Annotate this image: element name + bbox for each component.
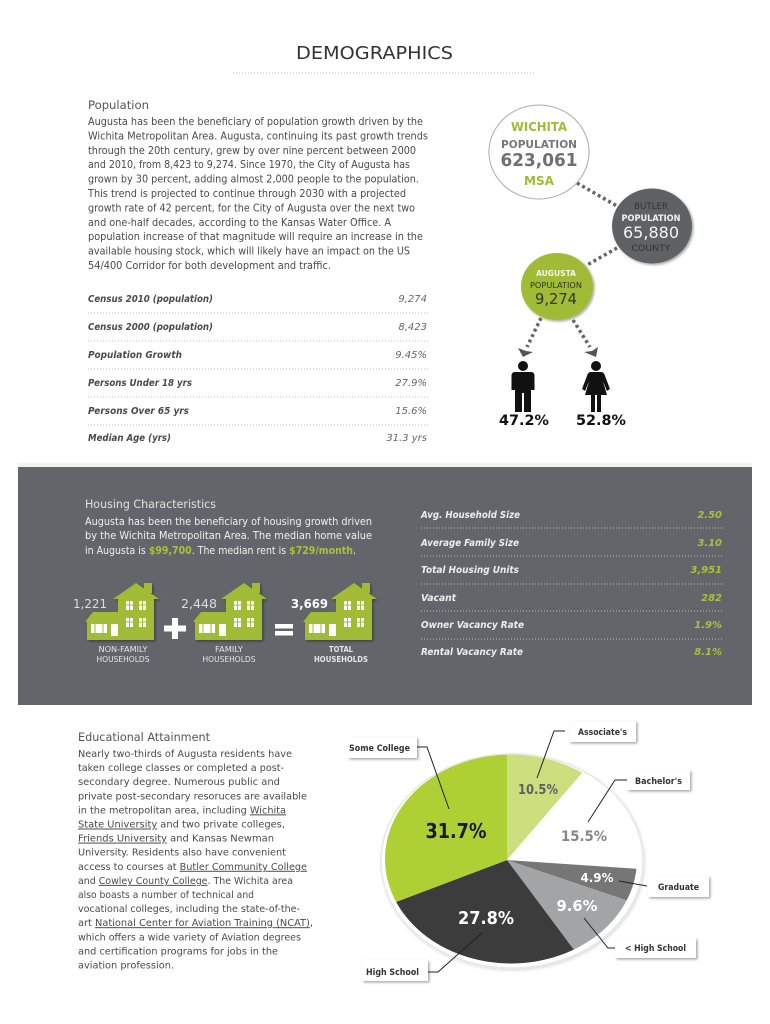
text block: population: growth rate of 42 percent, for the City of Augusta over the next two [88, 203, 415, 214]
table: population statistics: Persons Over 65 yrs [88, 406, 189, 417]
value: 15.5%: 15.5% [561, 829, 607, 845]
text block: education: taken college classes or completed a post- [78, 763, 284, 774]
table: population statistics [88, 294, 428, 444]
text block: housing [85, 517, 372, 557]
circle: Augusta: POPULATION [530, 281, 582, 290]
diagram: population hierarchy [489, 105, 692, 429]
value: family: 2,448 [181, 597, 217, 611]
text block: education: in the metropolitan area, including Wichita [78, 805, 286, 816]
value: total: 3,669 [291, 597, 328, 611]
text block: housing: by the Wichita Metropolitan Area. The median home value [85, 531, 372, 542]
text block: education: and certification programs for jobs in the [78, 946, 278, 957]
label: male percent: 47.2% [499, 413, 549, 429]
callout: some college [348, 737, 417, 758]
text block: population: and one-half decades, according to the Kansas Water Office. A [88, 218, 391, 229]
icon: plus [164, 618, 186, 639]
callout: bachelor's [627, 770, 690, 790]
leader: graduate [619, 881, 647, 886]
callout: graduate [648, 876, 709, 897]
leader: bachelor's [588, 780, 627, 822]
circle: Augusta [521, 253, 593, 320]
leader: high school [428, 933, 482, 972]
slice: graduate [508, 860, 636, 900]
table: population statistics: Census 2000 (population) [88, 322, 213, 333]
circle: Wichita: WICHITA [511, 119, 567, 134]
text block: education: secondary degree. Numerous public and [78, 777, 280, 788]
text block: population: 54/400 Corridor for both development and traffic. [88, 261, 331, 272]
table: population statistics: 8,423 [398, 322, 427, 333]
text block: education: University. Residents also have convenient [78, 848, 286, 859]
text block: education: Friends University and Kansas Newman [78, 834, 274, 845]
text block: population: available housing stock, which will likely have an impact on the US [88, 247, 410, 258]
callout: bachelor's: Bachelor's [635, 777, 682, 787]
table: housing statistics: 8.1% [694, 647, 722, 658]
slice: high school [396, 860, 574, 964]
table: housing statistics: 2.50 [697, 510, 722, 521]
callout: associate's: Associate's [578, 728, 627, 738]
circle: Wichita: POPULATION [501, 139, 577, 151]
label: total [314, 645, 368, 664]
table: housing statistics: 1.9% [694, 620, 722, 631]
connector: Wichita to Butler [577, 183, 617, 206]
text block: education: Nearly two-thirds of Augusta residents have [78, 749, 292, 760]
value: 31.7%: 31.7% [426, 819, 486, 843]
label: female percent: 52.8% [576, 413, 626, 429]
heading: population: Population [88, 98, 149, 112]
circle: Wichita: 623,061 [500, 150, 578, 171]
heading: educational attainment: Educational Attainment [78, 730, 210, 744]
pie chart: educational attainment [348, 721, 709, 981]
text block: education: State University and two private colleges, [78, 820, 285, 830]
icon: man [512, 361, 534, 412]
table: population statistics: Census 2010 (population) [88, 294, 213, 305]
text block: population: through the 20th century, grew by over nine percent between 2000 [88, 146, 416, 157]
arrow: to male [518, 318, 541, 357]
text block: education: art National Center for Aviation Training (NCAT), [78, 918, 313, 929]
leader: associate's [537, 731, 565, 778]
label: non-family: HOUSEHOLDS [96, 655, 150, 664]
table: housing statistics: Rental Vacancy Rate [421, 647, 523, 658]
callout: graduate: Graduate [658, 883, 699, 893]
circle: Butler: COUNTY [632, 244, 671, 254]
label: family [202, 645, 256, 664]
text block: population: This trend is projected to continue through 2030 with a projected [87, 189, 406, 200]
title: DEMOGRAPHICS [296, 43, 453, 64]
table: population statistics: 9.45% [395, 350, 427, 361]
table: population statistics: Population Growth [88, 350, 182, 361]
value: 10.5%: 10.5% [518, 783, 558, 798]
table: housing statistics: Avg. Household Size [420, 510, 520, 521]
circle: Wichita: MSA [524, 174, 555, 188]
text block: education: vocational colleges, including the state-of-the- [78, 904, 300, 915]
text block: population: grown by 30 percent, adding almost 2,000 people to the population. [88, 175, 419, 186]
circle: Butler: POPULATION [622, 214, 680, 224]
table: housing statistics: Average Family Size [420, 538, 519, 549]
value: 9.6%: 9.6% [556, 897, 598, 915]
callout: associate's [569, 721, 636, 742]
circle: Wichita [489, 105, 589, 199]
table: housing statistics: 3.10 [697, 538, 722, 549]
text block: education [78, 749, 313, 972]
panel: housing characteristics [18, 463, 752, 705]
slice: bachelor's [507, 773, 582, 860]
icon: woman [582, 361, 610, 412]
heading: housing: Housing Characteristics [85, 497, 216, 511]
table: population statistics: 27.9% [395, 378, 427, 389]
label: non-family: NON-FAMILY [98, 645, 148, 654]
leader: less than high school [584, 918, 615, 948]
text block: education: private post-secondary resoruces are available [78, 791, 307, 802]
circle: Butler [612, 188, 692, 264]
label: total: HOUSEHOLDS [314, 655, 368, 664]
text block: education: aviation profession. [78, 960, 174, 972]
value: 27.8%: 27.8% [458, 908, 514, 929]
icon: equals [275, 624, 293, 636]
callout: less than high school [615, 938, 696, 958]
value: non-family: 1,221 [73, 597, 107, 611]
text block: education: access to courses at Butler Community College [78, 862, 307, 873]
text block: education: also boasts a number of technical and [78, 890, 254, 901]
circle: Augusta: AUGUSTA [536, 269, 577, 278]
callout: less than high school: < High School [625, 944, 686, 954]
circle: Butler: 65,880 [623, 223, 679, 242]
slice: less than high school [507, 860, 626, 950]
icon: house non-family [85, 583, 159, 640]
callout: high school [362, 960, 428, 981]
table: population statistics: Persons Under 18 yrs [88, 378, 192, 389]
text block: population [87, 117, 428, 272]
table: housing statistics: 3,951 [690, 565, 722, 576]
table: population statistics: Median Age (yrs) [88, 433, 171, 444]
label: non-family [96, 645, 150, 664]
table: housing statistics: Vacant [421, 593, 457, 604]
text block: housing: in Augusta is $99,700. The median rent is $729/month. [85, 546, 356, 557]
circle: Butler: BUTLER [634, 202, 668, 212]
connector: Butler to Augusta [587, 248, 617, 265]
table: housing statistics [420, 510, 722, 658]
label: total: TOTAL [329, 645, 353, 654]
text block: education: which offers a wide variety of Aviation degrees [78, 932, 301, 943]
text block: education: and Cowley County College. The Wichita area [78, 876, 293, 887]
icon: house family [193, 583, 267, 640]
text block: population: Wichita Metropolitan Area. Augusta, continuing its past growth trends [88, 131, 428, 142]
callout: some college: Some College [349, 744, 410, 754]
table: housing statistics: Owner Vacancy Rate [421, 620, 524, 631]
slice: associate's [507, 754, 582, 860]
value: 4.9%: 4.9% [580, 870, 614, 885]
leader: some college [417, 747, 449, 809]
text block: population: and 2010, from 8,423 to 9,274. Since 1970, the City of Augusta has [88, 160, 410, 171]
label: family: FAMILY [215, 645, 243, 654]
table: population statistics: 31.3 yrs [386, 433, 427, 444]
table: housing statistics: 282 [701, 593, 722, 604]
arrow: to female [573, 320, 598, 357]
slice: some college [385, 754, 507, 902]
table: population statistics: 15.6% [395, 406, 427, 417]
circle: Augusta: 9,274 [535, 290, 577, 308]
icon: house total [303, 583, 377, 640]
text block: population: population increase of that magnitude will require an increase in the [88, 232, 423, 243]
text block: population: Augusta has been the beneficiary of population growth driven by the [88, 117, 423, 128]
label: family: HOUSEHOLDS [202, 655, 256, 664]
callout: high school: High School [366, 968, 419, 978]
table: housing statistics: Total Housing Units [421, 565, 519, 576]
table: population statistics: 9,274 [398, 294, 427, 305]
text block: housing: Augusta has been the beneficiary of housing growth driven [85, 517, 372, 528]
